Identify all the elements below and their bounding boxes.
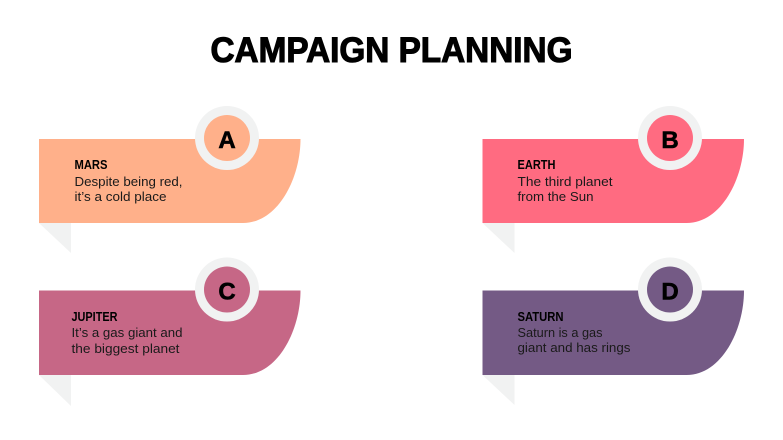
- fold: D: [482, 375, 514, 405]
- panel: C Jupiter: [39, 258, 300, 406]
- text: Jupiter: It’s a gas giant and: [72, 326, 183, 340]
- title: CAMPAIGN PLANNING: [210, 31, 572, 70]
- panel: A Mars: [39, 106, 300, 253]
- fold: C: [39, 375, 71, 406]
- badge: C: C: [218, 278, 236, 306]
- text: Earth: from the Sun: [518, 190, 594, 204]
- text: Saturn: Saturn is a gas: [518, 326, 602, 340]
- text: Earth: [518, 158, 613, 204]
- card: D: [482, 290, 744, 375]
- badge: D: D: [661, 278, 679, 306]
- text: Saturn: [518, 310, 630, 355]
- text: Mars: Despite being red,: [74, 175, 182, 189]
- fold: A: [39, 223, 71, 253]
- badge: B: [638, 106, 702, 170]
- text: Earth: EARTH: [518, 158, 556, 172]
- badge: D: [638, 258, 702, 322]
- card: C: [39, 290, 300, 375]
- text: Mars: it’s a cold place: [74, 190, 167, 204]
- text: Saturn: SATURN: [518, 310, 564, 324]
- badge: B: B: [661, 127, 679, 154]
- panel: B Earth: [482, 106, 744, 253]
- card: A: [39, 139, 300, 223]
- text: Mars: [74, 158, 182, 204]
- text: Jupiter: [72, 310, 183, 356]
- card: B: [482, 139, 744, 223]
- badge: A: [195, 106, 259, 170]
- badge: A: A: [218, 127, 236, 154]
- panel: D Saturn: [482, 258, 744, 405]
- text: Mars: MARS: [74, 158, 108, 172]
- text: Earth: The third planet: [518, 175, 613, 189]
- text: Jupiter: the biggest planet: [72, 342, 180, 356]
- text: Jupiter: JUPITER: [72, 310, 118, 324]
- fold: B: [482, 223, 514, 253]
- text: Saturn: giant and has rings: [518, 341, 630, 355]
- badge: C: [195, 258, 259, 322]
